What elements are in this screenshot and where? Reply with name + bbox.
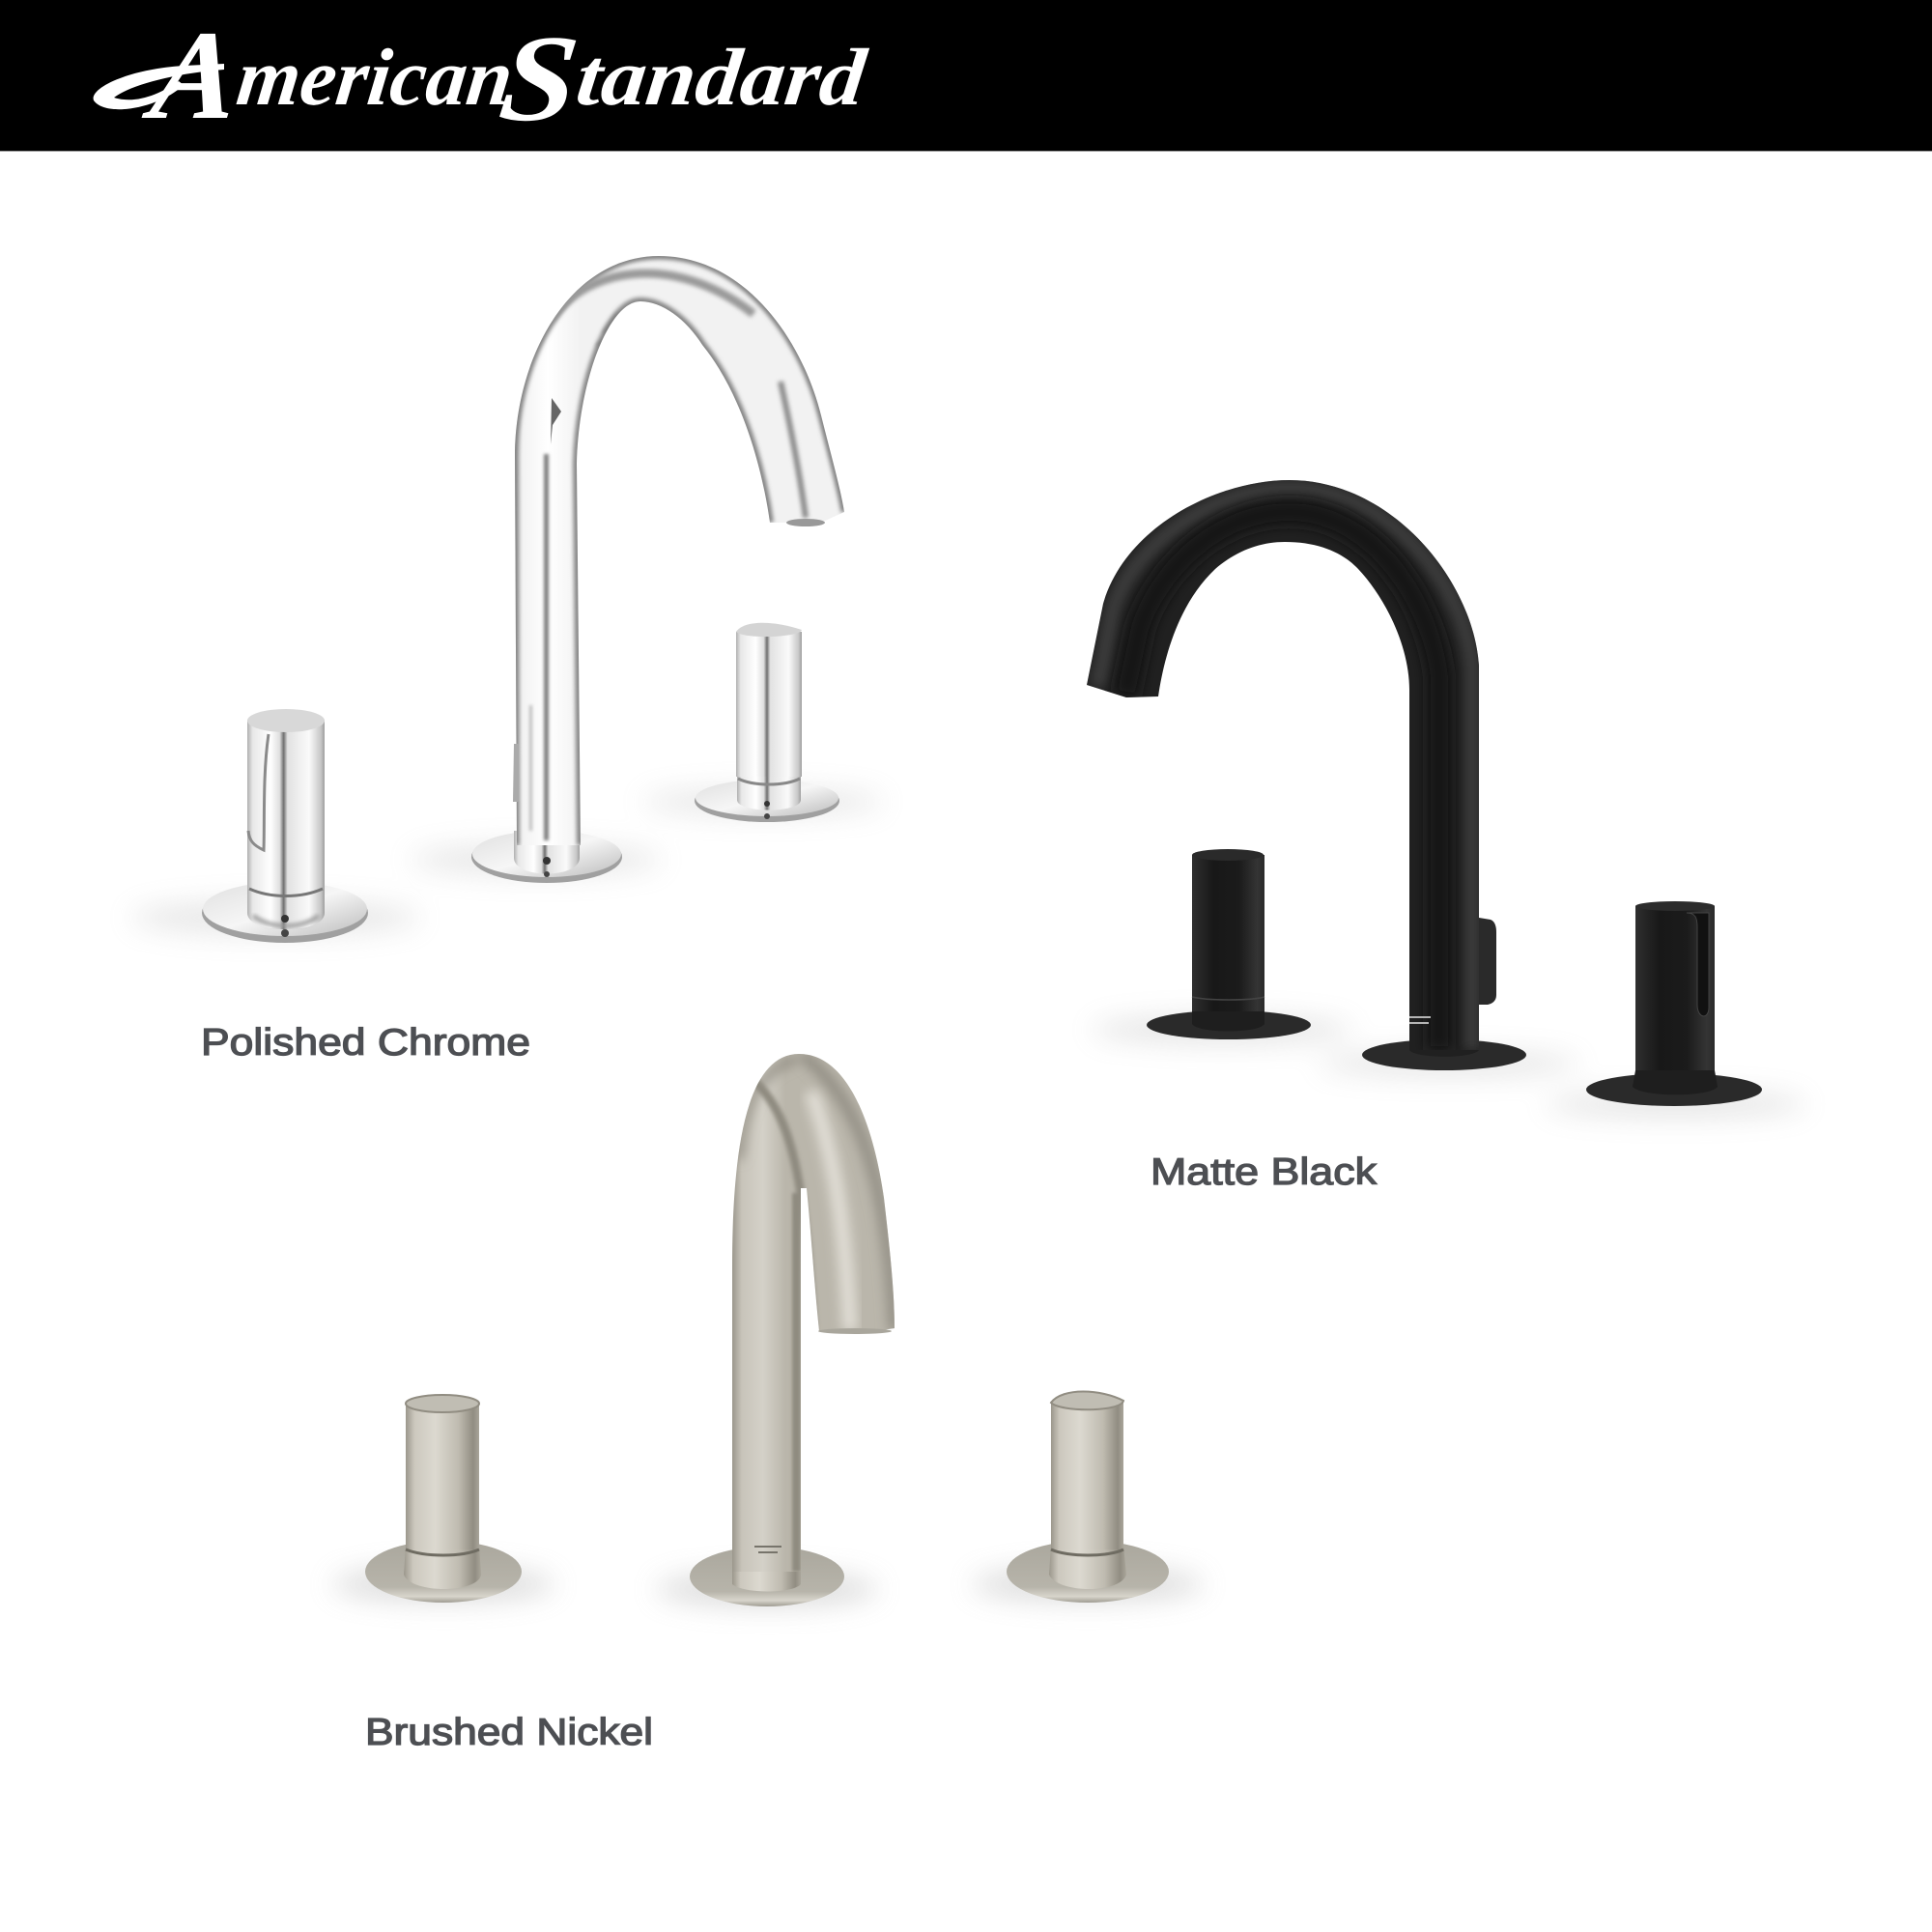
logo: American Standard: S	[494, 10, 585, 147]
faucet: polished chrome	[130, 256, 884, 943]
floor shadows	[1092, 1016, 1806, 1117]
label: Matte Black: Matte Black	[1151, 1151, 1378, 1193]
small brand mark	[1409, 1016, 1431, 1024]
logo: American Standard: tandard	[572, 33, 872, 123]
nickel left handle	[365, 1395, 522, 1603]
black spout	[1087, 480, 1526, 1070]
nickel spout	[690, 1054, 895, 1606]
chrome spout	[471, 256, 844, 883]
chrome left handle	[202, 709, 368, 943]
nickel right handle	[1007, 1391, 1169, 1603]
faucet: matte black	[1087, 480, 1806, 1117]
floor shadows	[332, 1567, 1204, 1606]
faucet: brushed nickel	[332, 1054, 1204, 1606]
chrome right handle	[695, 623, 839, 822]
black left handle	[1147, 849, 1311, 1039]
label: Polished Chrome: Polished Chrome	[201, 1022, 530, 1064]
sensor tab	[1479, 918, 1496, 1005]
header banner	[0, 0, 1932, 152]
logo: American Standard: A	[138, 4, 246, 146]
label: Brushed Nickel: Brushed Nickel	[365, 1712, 653, 1753]
floor shadows	[130, 788, 884, 935]
logo: American Standard: merican	[233, 33, 518, 123]
black right handle	[1586, 901, 1762, 1106]
logo: American Standard	[94, 4, 875, 147]
small brand mark	[754, 1546, 781, 1553]
